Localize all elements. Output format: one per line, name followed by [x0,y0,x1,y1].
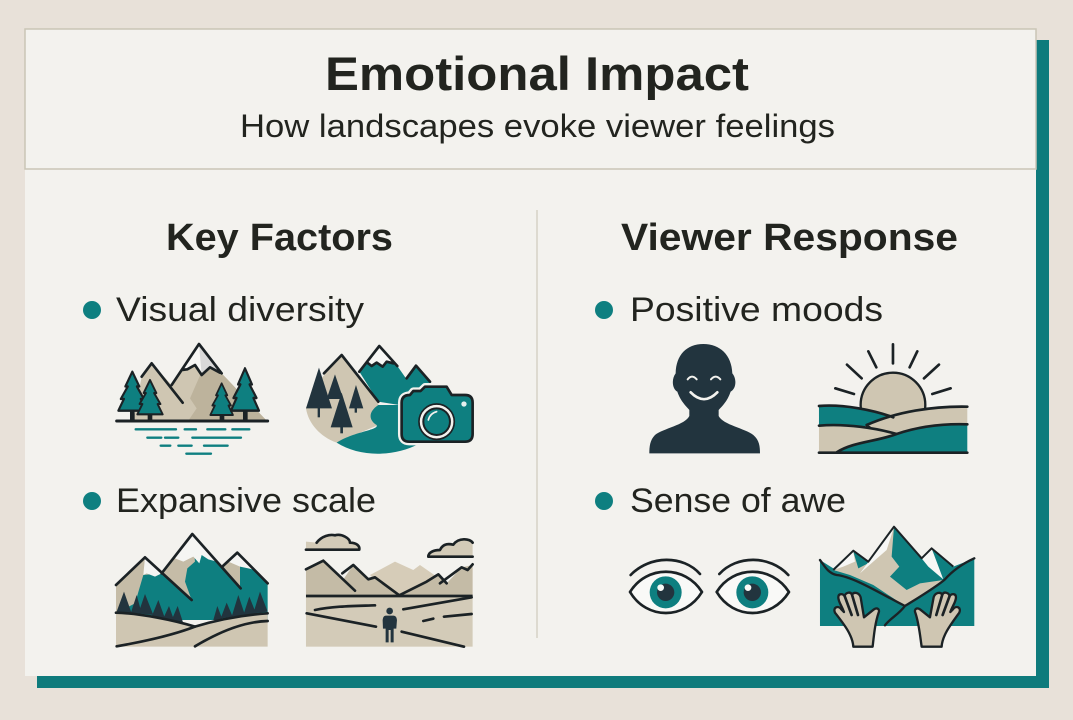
bullet: visual diversity: Visual diversity [116,291,364,329]
icon: sunrise over hills [819,344,967,453]
heading: viewer response: Viewer Response [621,217,958,259]
bullet: expansive scale: Expansive scale [116,482,376,520]
icon: expansive mountain range [116,534,268,647]
bullet: sense of awe: Sense of awe [630,482,846,520]
bullet: positive moods: Positive moods [630,291,883,329]
icon: figure on open plain [306,535,473,647]
icon: smiling person [649,344,760,453]
icon: mountain lake with trees [117,344,268,454]
icon: wide-open eyes [630,560,789,613]
subtitle: How landscapes evoke viewer feelings [240,108,835,144]
icon: mountain with raised hands [820,526,974,647]
icon: landscape with camera [306,346,473,454]
title: Emotional Impact [325,47,749,100]
heading: key factors: Key Factors [166,217,393,259]
